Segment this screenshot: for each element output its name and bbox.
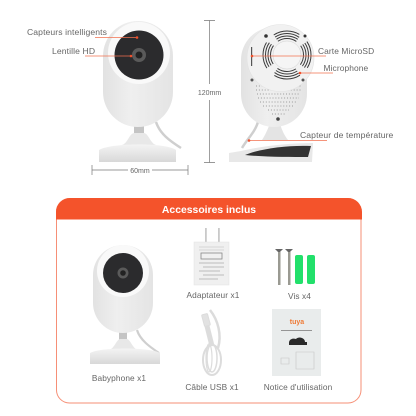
item: user manual: [272, 309, 321, 376]
item: user manual: tuya: [290, 319, 304, 326]
label: Carte MicroSD: [251, 46, 374, 57]
label: Microphone: Microphone: [324, 63, 369, 73]
panel header: [56, 198, 362, 220]
label: Capteurs intelligents: Capteurs intelligents: [27, 27, 107, 37]
item: babyphone: [90, 245, 160, 364]
caption: Adaptateur x1: Adaptateur x1: [187, 290, 240, 300]
caption: Vis x4: Vis x4: [288, 291, 311, 301]
dimension: 60mm: 60mm: [130, 168, 150, 175]
label: Lentille HD: [52, 46, 132, 57]
label: Capteur de température: Capteur de température: [300, 130, 394, 140]
panel: accessories: [56, 198, 362, 403]
front camera: [99, 21, 181, 162]
label: Lentille HD: Lentille HD: [52, 46, 95, 56]
item: screws and plugs: [275, 249, 315, 285]
dimension: 120mm: 120mm: [198, 90, 221, 97]
label: Microphone: [299, 63, 369, 74]
caption: Câble USB x1: Câble USB x1: [185, 382, 239, 392]
dimension: 120mm: [198, 20, 221, 162]
item: USB cable: [202, 310, 221, 375]
label: Carte MicroSD: Carte MicroSD: [318, 46, 374, 56]
dimension: 60mm: [92, 165, 188, 175]
back camera: [229, 24, 314, 162]
item: power adapter: [194, 228, 229, 285]
caption: Babyphone x1: Babyphone x1: [92, 373, 146, 383]
heading: Accessoires inclus: Accessoires inclus: [162, 205, 256, 216]
speaker grille: [256, 86, 301, 114]
caption: Notice d'utilisation: Notice d'utilisation: [264, 382, 333, 392]
label: Capteurs intelligents: [27, 27, 138, 39]
